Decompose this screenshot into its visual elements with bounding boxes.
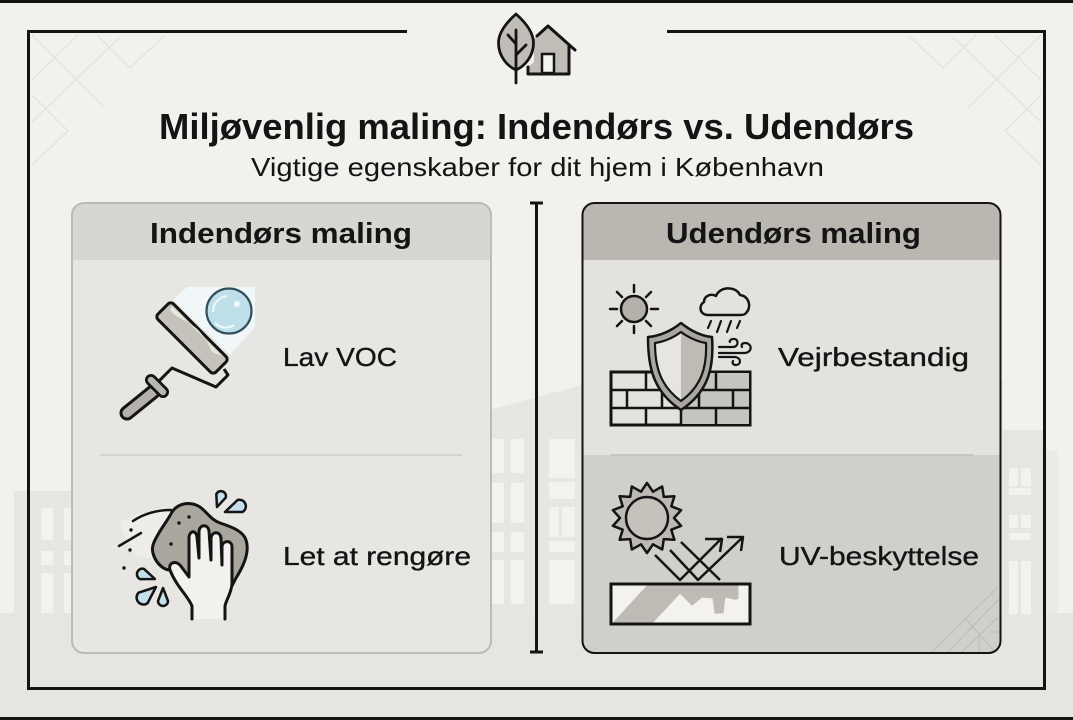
corner line patterns (32, 35, 1041, 165)
icon: UV reflection on painted surface (611, 483, 750, 624)
row divider (100, 454, 462, 456)
label: weather resistant: Vejrbestandig (778, 342, 969, 372)
corner pattern (932, 587, 999, 652)
panel: indoor paint (72, 203, 491, 653)
row divider (611, 454, 973, 456)
heading: indoor paint: Indendørs maling (150, 218, 412, 250)
label: UV protection: UV-beskyttelse (779, 541, 979, 571)
icon: tree and house (498, 14, 575, 83)
label: low VOC: Lav VOC (283, 342, 397, 372)
subtitle: Vigtige egenskaber for dit hjem i København (251, 152, 824, 182)
label: easy to clean: Let at rengøre (283, 541, 471, 571)
icon: hand wiping with sponge (119, 491, 247, 619)
panel: outdoor paint (582, 203, 1000, 653)
icon: paint roller with bubble (127, 287, 255, 413)
heading: outdoor paint: Udendørs maling (666, 218, 921, 250)
background: faded city skyline (0, 380, 1073, 717)
center divider (530, 203, 543, 652)
icon: weather shield and brick wall (610, 285, 751, 425)
title: Miljøvenlig maling: Indendørs vs. Udendørs (159, 106, 914, 147)
